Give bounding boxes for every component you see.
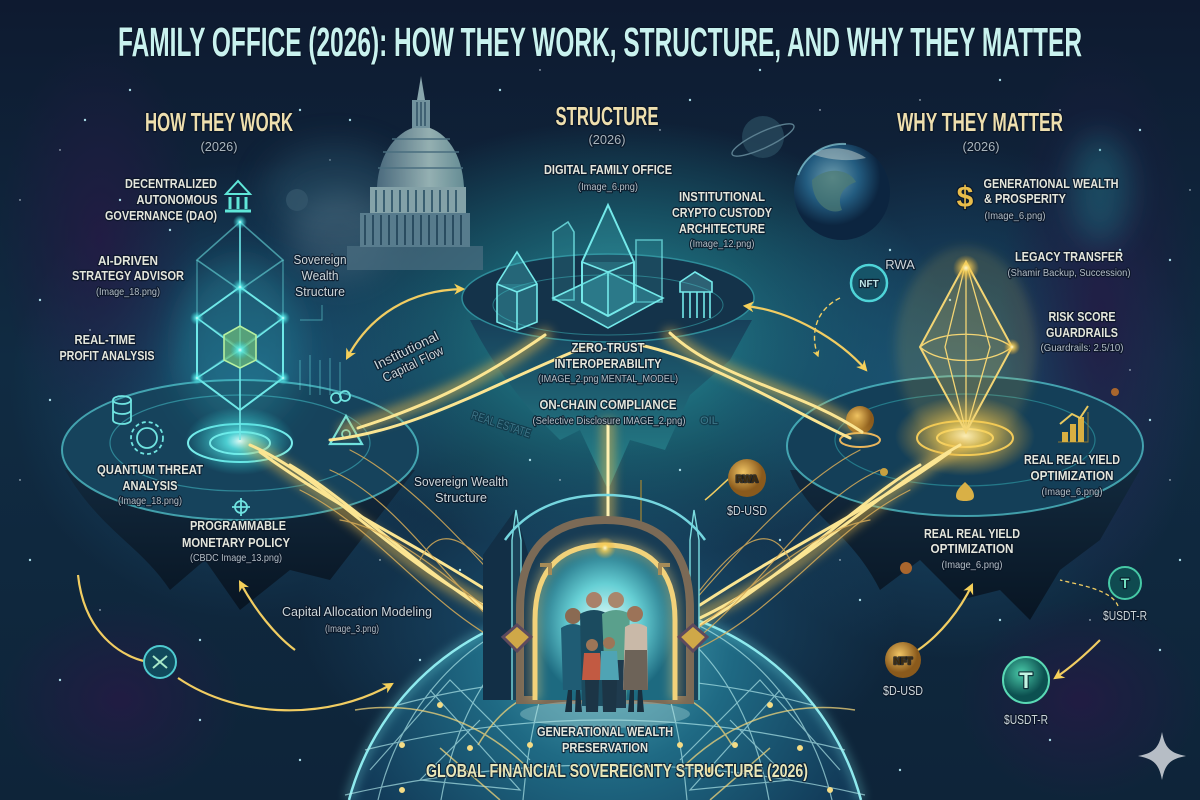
text: quantum threat analysis xyxy=(97,462,203,507)
text: sovereign wealth structure upper: Structure xyxy=(295,284,345,299)
text: programmable monetary policy: MONETARY POLICY xyxy=(182,535,290,550)
text: quantum threat analysis: QUANTUM THREAT xyxy=(97,462,203,477)
text: capital allocation modeling: Capital Allocation Modeling xyxy=(282,604,432,619)
heading: why they matter xyxy=(897,107,1063,154)
label: USDT lower: $USDT-R xyxy=(1004,712,1048,727)
buildings and crystals: digital family office xyxy=(497,205,712,330)
text: zero-trust interoperability: INTEROPERABILITY xyxy=(554,356,662,371)
heading: why they matter: WHY THEY MATTER xyxy=(897,107,1063,137)
text: real-time profit analysis: REAL-TIME xyxy=(74,332,136,347)
text: legacy transfer: (Shamir Backup, Succession) xyxy=(1008,267,1130,279)
earth xyxy=(794,144,890,240)
coin: NFT small teal xyxy=(851,265,887,301)
text: generational wealth preservation: GENERATIONAL WEALTH xyxy=(537,724,673,739)
portal arch xyxy=(483,495,707,700)
text: capital allocation modeling: (Image_3.png) xyxy=(325,623,379,635)
heading: how they work xyxy=(145,107,293,154)
text: sovereign wealth structure lower: Sovereign Wealth xyxy=(414,474,508,489)
coin: NFT gold xyxy=(885,642,921,678)
label: USDT upper: $USDT-R xyxy=(1103,608,1147,623)
text: legacy transfer xyxy=(1008,249,1130,279)
text: institutional capital flow: Institutional xyxy=(372,328,441,372)
text: AI-driven strategy advisor xyxy=(72,253,185,298)
text: digital family office: DIGITAL FAMILY OFFICE xyxy=(544,162,672,177)
crystal: gold octahedron xyxy=(896,247,1036,447)
text: zero-trust interoperability xyxy=(538,340,678,385)
heading: how they work: HOW THEY WORK xyxy=(145,107,293,137)
label: D-USD mid: $D-USD xyxy=(727,503,767,518)
coin: RWA gold: RWA xyxy=(736,474,758,485)
label: D-USD low: $D-USD xyxy=(883,683,923,698)
text: generational wealth preservation: PRESERVATION xyxy=(562,740,648,755)
text: sovereign wealth structure upper: Wealth xyxy=(302,268,338,283)
crystal: hexagonal lattice xyxy=(178,215,340,440)
text: institutional capital flow xyxy=(372,328,448,386)
panel: central floating island xyxy=(462,254,754,490)
moon xyxy=(286,189,308,211)
arrows: curved capital flows xyxy=(78,289,1118,710)
icons: left island symbols xyxy=(113,391,362,516)
text: DAO: DECENTRALIZED xyxy=(125,176,217,191)
text: institutional crypto custody xyxy=(672,189,772,250)
coin: USDT large: T xyxy=(1019,668,1033,693)
text: on-chain compliance: ON-CHAIN COMPLIANCE xyxy=(540,397,677,412)
coin: USDT large xyxy=(1003,657,1049,703)
heading: how they work: (2026) xyxy=(200,139,238,154)
coin: NFT small teal: NFT xyxy=(859,279,879,290)
text: real yield lower xyxy=(924,526,1020,571)
text: on-chain compliance xyxy=(532,397,686,427)
text: quantum threat analysis: ANALYSIS xyxy=(122,478,178,493)
text: risk score guardrails: RISK SCORE xyxy=(1048,309,1116,324)
text: zero-trust interoperability: (IMAGE_2.png MENTAL_MODEL) xyxy=(538,373,678,385)
text: institutional crypto custody: (Image_12.png) xyxy=(690,238,754,250)
text: real-time profit analysis xyxy=(60,332,155,363)
text: real-time profit analysis: PROFIT ANALYSIS xyxy=(60,348,155,363)
text: generational wealth and prosperity: (Image_6.png) xyxy=(984,210,1046,222)
icon: bank building xyxy=(225,181,251,211)
text: sovereign wealth structure lower xyxy=(414,474,508,505)
icons: right island symbols xyxy=(840,388,1119,574)
icon: sparkle watermark xyxy=(1138,732,1186,780)
text: risk score guardrails xyxy=(1040,309,1124,354)
text: institutional crypto custody: INSTITUTIONAL xyxy=(679,189,765,204)
text: programmable monetary policy: (CBDC Image_13.png) xyxy=(190,552,282,564)
globe network xyxy=(345,603,865,800)
coin: USDT small: T xyxy=(1121,575,1130,591)
text: digital family office xyxy=(544,162,672,193)
text: AI-driven strategy advisor: STRATEGY ADVISOR xyxy=(72,268,185,283)
text: DAO: AUTONOMOUS xyxy=(136,192,218,207)
text: quantum threat analysis: (Image_18.png) xyxy=(118,495,182,507)
text: institutional crypto custody: CRYPTO CUSTODY xyxy=(672,205,772,220)
text: institutional capital flow: Capital Flow xyxy=(380,342,446,385)
text: risk score guardrails: GUARDRAILS xyxy=(1046,325,1118,340)
text: DAO xyxy=(105,176,218,223)
text: DAO: GOVERNANCE (DAO) xyxy=(105,208,217,223)
faint labels: real estate and oil xyxy=(470,408,718,440)
heading: structure xyxy=(556,101,658,147)
heading: structure: (2026) xyxy=(588,132,626,147)
text: sovereign wealth structure upper xyxy=(294,252,346,299)
text: generational wealth and prosperity xyxy=(984,176,1118,222)
panel: left floating island xyxy=(62,380,418,610)
icon: dollar sign: $ xyxy=(957,181,974,214)
text: generational wealth and prosperity: GENERATIONAL WEALTH xyxy=(984,176,1118,191)
text: real yield lower: OPTIMIZATION xyxy=(930,541,1014,556)
text: real yield upper xyxy=(1024,452,1120,498)
panel: right floating island xyxy=(787,376,1143,620)
text: legacy transfer: LEGACY TRANSFER xyxy=(1015,249,1124,264)
text: real yield upper: REAL REAL YIELD xyxy=(1024,452,1120,467)
text: programmable monetary policy: PROGRAMMABLE xyxy=(190,518,286,533)
text: capital allocation modeling xyxy=(282,604,432,635)
family group xyxy=(520,592,690,728)
text: sovereign wealth structure lower: Structure xyxy=(435,490,487,505)
coin: RWA gold xyxy=(728,459,766,497)
coin: USDT small xyxy=(1109,567,1141,599)
text: digital family office: (Image_6.png) xyxy=(578,181,638,193)
heading: structure: STRUCTURE xyxy=(556,101,658,131)
text: generational wealth and prosperity: & PROSPERITY xyxy=(984,191,1066,206)
faint labels: real estate and oil: REAL ESTATE xyxy=(470,408,533,440)
text: risk score guardrails: (Guardrails: 2.5/10) xyxy=(1040,342,1124,354)
coin: NFT gold: NFT xyxy=(894,656,912,667)
planet with ring xyxy=(729,116,797,162)
text: real yield upper: (Image_6.png) xyxy=(1042,486,1102,498)
coin: left small xyxy=(144,646,176,678)
text: AI-driven strategy advisor: (Image_18.png) xyxy=(96,286,160,298)
lightning: energy flows xyxy=(250,333,960,650)
text: programmable monetary policy xyxy=(182,518,290,564)
text: real yield upper: OPTIMIZATION xyxy=(1030,468,1114,483)
footer title: GLOBAL FINANCIAL SOVEREIGNTY STRUCTURE (2026) xyxy=(426,761,808,781)
text: zero-trust interoperability: ZERO-TRUST xyxy=(572,340,645,355)
text: generational wealth preservation xyxy=(537,724,673,755)
text: sovereign wealth structure upper: Sovereign xyxy=(294,252,346,267)
text: AI-driven strategy advisor: AI-DRIVEN xyxy=(98,253,158,268)
text: real yield lower: REAL REAL YIELD xyxy=(924,526,1020,541)
text: real yield lower: (Image_6.png) xyxy=(942,559,1002,571)
label: RWA: RWA xyxy=(885,257,915,272)
heading: why they matter: (2026) xyxy=(962,139,1000,154)
capitol building xyxy=(347,76,483,270)
text: on-chain compliance: (Selective Disclosure IMAGE_2.png) xyxy=(532,415,686,427)
text: institutional crypto custody: ARCHITECTURE xyxy=(679,221,765,236)
faint labels: real estate and oil: OIL xyxy=(700,415,718,427)
